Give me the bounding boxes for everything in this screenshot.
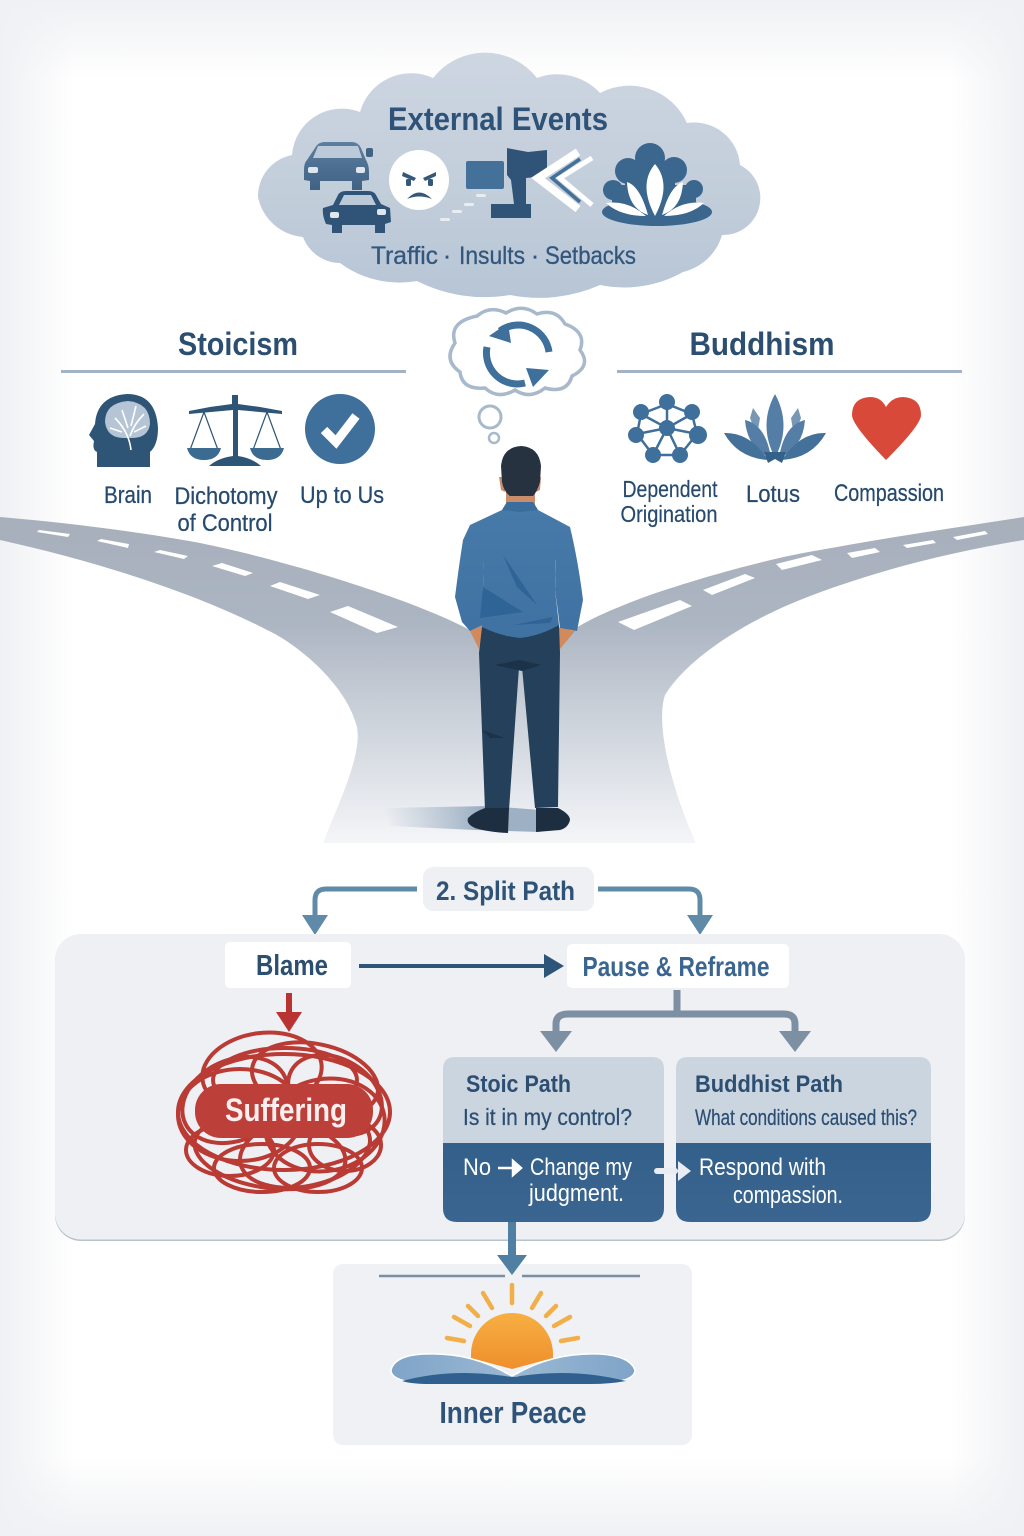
- label: Suffering: Suffering: [225, 1092, 347, 1128]
- forked road: [0, 517, 1024, 843]
- card: stoic path: [443, 1057, 664, 1222]
- icon: sunrise: [391, 1285, 635, 1384]
- thought bubble with cycle icon: [450, 308, 584, 443]
- arrow: to inner peace: [497, 1222, 527, 1275]
- icon: angry face: [389, 150, 449, 210]
- box: Pause and Reframe: Pause & Reframe: [582, 951, 770, 982]
- road surface: [0, 517, 1024, 843]
- icon: megaphone and signpost: [440, 148, 592, 221]
- cloud: external events: [258, 53, 760, 298]
- heading: Stoic Path: Stoic Path: [466, 1071, 571, 1098]
- icon: check circle: [305, 394, 375, 464]
- icon: heart: [852, 397, 921, 460]
- title: Inner Peace: Inner Peace: [440, 1395, 586, 1430]
- arrow: blame to pause: [359, 954, 564, 978]
- panel: decision flow: [55, 934, 965, 1241]
- water waves: [391, 1354, 635, 1383]
- label: Compassion: Compassion: [834, 480, 944, 507]
- label: Lotus: Lotus: [746, 481, 800, 508]
- ground shadow: [385, 806, 540, 832]
- box: Blame: Blame: [256, 950, 328, 982]
- question: Is it in my control: Is it in my control?: [463, 1104, 632, 1130]
- icon: cars: [304, 142, 391, 233]
- arrow: stoic answer to buddhist answer: [654, 1161, 691, 1181]
- caption: traffic, insults, setbacks: ·: [443, 242, 451, 270]
- answer: Respond with compassion: Respond with: [699, 1154, 826, 1181]
- caption: traffic, insults, setbacks: Setbacks: [545, 242, 636, 270]
- question: What conditions caused this: What conditions caused this?: [695, 1105, 917, 1130]
- icon: brain: [89, 394, 158, 467]
- answer: Respond with compassion: compassion.: [733, 1182, 843, 1209]
- label: Dependent Origination: Dependent: [622, 476, 718, 502]
- label: Dependent Origination: Origination: [620, 501, 718, 527]
- caption: traffic, insults, setbacks: Insults: [459, 242, 525, 270]
- step label: 2. Split Path: [423, 867, 594, 911]
- icon: cycle arrows: [486, 323, 549, 387]
- cloud shape: [258, 53, 760, 298]
- sun rays: [447, 1285, 578, 1341]
- caption: traffic, insults, setbacks: ·: [531, 242, 539, 270]
- pants: [479, 625, 560, 810]
- answer: No, change my judgment: judgment.: [528, 1180, 624, 1207]
- icon: lotus: [602, 143, 712, 226]
- arrow: blame to suffering: [276, 993, 302, 1032]
- figure: man standing at the fork: [385, 446, 583, 833]
- arrow: split to blame: [302, 889, 417, 935]
- answer: No, change my judgment: [463, 1154, 632, 1207]
- section: stoicism: [61, 326, 406, 537]
- heading: Stoicism: Stoicism: [178, 326, 298, 362]
- tangle: suffering: [168, 1025, 396, 1199]
- hands: [470, 625, 575, 649]
- neck and ears: [499, 477, 541, 506]
- icon: lotus flower: [724, 394, 826, 463]
- head: [501, 446, 541, 496]
- shirt: [455, 502, 583, 631]
- heading: Buddhist Path: Buddhist Path: [695, 1071, 843, 1098]
- shirt folds: [480, 555, 553, 625]
- icon: scales: [187, 395, 284, 466]
- label: Up to Us: Up to Us: [300, 482, 384, 509]
- caption: traffic, insults, setbacks: Traffic: [371, 242, 438, 270]
- label: Brain: Brain: [104, 482, 152, 509]
- box: Pause and Reframe: [567, 944, 789, 988]
- shoes: [468, 808, 570, 833]
- answer: No, change my judgment: Change my: [530, 1154, 632, 1181]
- label: Dichotomy of Control: of Control: [178, 510, 272, 537]
- heading: Buddhism: Buddhism: [690, 326, 834, 362]
- section: buddhism: [617, 326, 962, 527]
- panel: inner peace: [333, 1264, 692, 1445]
- label: Dichotomy of Control: [174, 483, 278, 537]
- caption: traffic, insults, setbacks: [371, 242, 636, 270]
- label: Dichotomy of Control: Dichotomy: [174, 483, 278, 510]
- road dashes: [37, 530, 988, 633]
- icon: dependent origination network: [628, 394, 707, 463]
- label: Dependent Origination: [620, 476, 718, 527]
- step label: 2. Split Path: 2. Split Path: [436, 876, 575, 906]
- answer: No, change my judgment: No: [463, 1154, 491, 1181]
- card: buddhist path: [676, 1057, 931, 1222]
- answer: Respond with compassion: [699, 1154, 843, 1209]
- arrow: split to pause: [598, 889, 713, 935]
- arrow: reframe branches: [540, 990, 811, 1052]
- box: Blame: [225, 942, 351, 988]
- title: External Events: External Events: [388, 101, 608, 137]
